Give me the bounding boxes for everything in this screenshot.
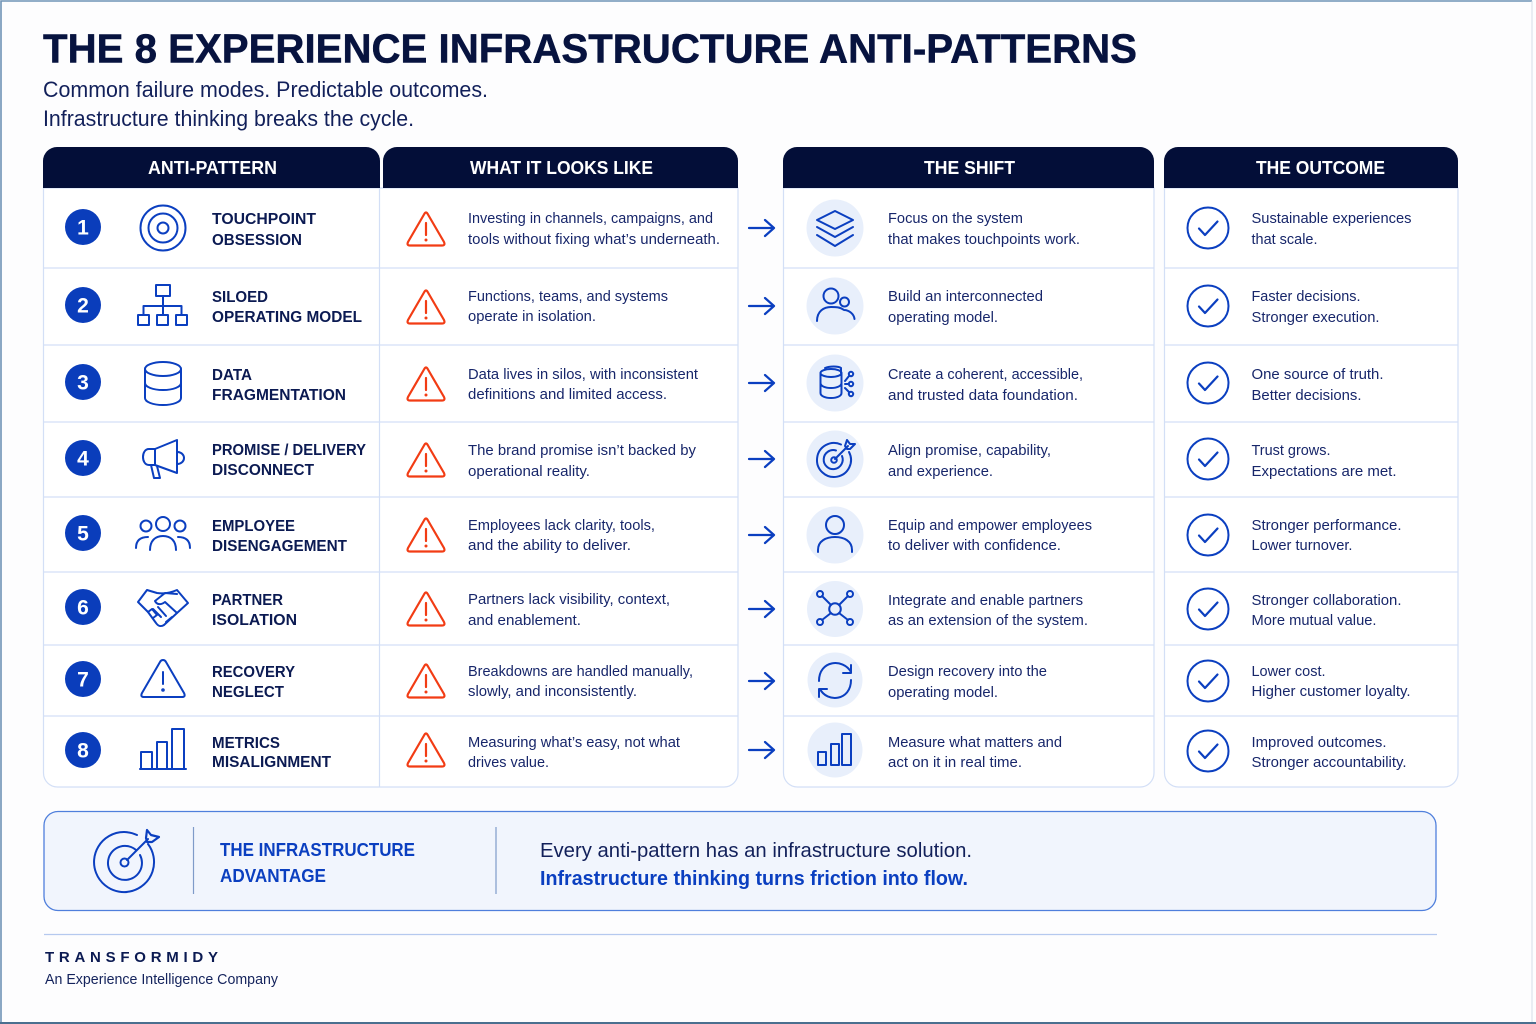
icon: data network	[820, 366, 853, 398]
row 3: 3	[77, 372, 89, 394]
row 2: 2	[77, 294, 89, 318]
subtitle: Common failure modes. Predictable outcomes.	[43, 77, 488, 102]
row 4	[65, 430, 1396, 488]
row 3: Data lives in silos, with inconsistent	[468, 366, 699, 383]
callout: infrastructure advantage: Infrastructure thinking turns friction into flow.	[540, 867, 968, 890]
row 7	[65, 652, 1410, 708]
row 7: RECOVERY	[212, 664, 295, 681]
row 3: definitions and limited access.	[468, 386, 667, 403]
row 4: Trust grows.	[1252, 442, 1330, 459]
header: anti-pattern: ANTI-PATTERN	[148, 158, 277, 178]
callout: infrastructure advantage: THE INFRASTRUCTURE	[220, 840, 415, 860]
row 6: More mutual value.	[1252, 612, 1376, 629]
icon: megaphone	[143, 440, 184, 478]
row 1: Focus on the system	[888, 210, 1023, 227]
row 5: Lower turnover.	[1252, 537, 1352, 554]
row 4: The brand promise isn’t backed by	[468, 442, 696, 459]
row 6: Partners lack visibility, context,	[468, 591, 670, 608]
row 4: operational reality.	[468, 463, 590, 480]
row 3: FRAGMENTATION	[212, 387, 346, 404]
row 2: Build an interconnected	[888, 288, 1043, 305]
icon: layers	[817, 211, 853, 246]
row 5: DISENGAGEMENT	[212, 538, 347, 555]
icon: team	[136, 517, 190, 550]
header: anti-pattern	[43, 147, 380, 188]
header: the shift: THE SHIFT	[924, 158, 1015, 178]
row 6: and enablement.	[468, 612, 581, 629]
row 1: that makes touchpoints work.	[888, 231, 1080, 248]
row 8: Measuring what’s easy, not what	[468, 734, 681, 751]
row 1: tools without fixing what’s underneath.	[468, 231, 720, 248]
row 6: as an extension of the system.	[888, 612, 1088, 629]
row 4: Align promise, capability,	[888, 442, 1051, 459]
row 8: METRICS	[212, 735, 280, 752]
row 6: Stronger collaboration.	[1252, 592, 1402, 609]
subtitle	[43, 77, 488, 131]
row 4: 4	[77, 448, 89, 470]
icon: bar chart small	[818, 734, 851, 765]
row 8: act on it in real time.	[888, 754, 1022, 771]
row 5: Equip and empower employees	[888, 517, 1092, 534]
row 3	[65, 354, 1384, 412]
icon: people	[817, 288, 854, 321]
row 7: Higher customer loyalty.	[1252, 683, 1410, 700]
icon: target with arrow	[94, 830, 159, 892]
row 2	[65, 278, 1380, 334]
subtitle: Infrastructure thinking breaks the cycle.	[43, 106, 414, 131]
icon: target and arrow	[817, 440, 855, 477]
row 1: OBSESSION	[212, 232, 302, 249]
row 3: One source of truth.	[1252, 366, 1384, 383]
row 4: PROMISE / DELIVERY	[212, 442, 366, 459]
header: the outcome: THE OUTCOME	[1256, 158, 1385, 178]
row 2: SILOED	[212, 289, 268, 306]
header: the outcome	[1164, 133, 1458, 188]
panel: outcome body	[1164, 188, 1458, 787]
row 1: that scale.	[1252, 231, 1318, 248]
row 8: drives value.	[468, 754, 549, 771]
icon: database	[145, 362, 181, 405]
icon: handshake	[138, 590, 188, 626]
row 3: Better decisions.	[1252, 387, 1362, 404]
row 1: Investing in channels, campaigns, and	[468, 210, 713, 227]
row 7: slowly, and inconsistently.	[468, 683, 637, 700]
row 5: EMPLOYEE	[212, 518, 295, 535]
row 8: Measure what matters and	[888, 734, 1062, 751]
row 8: 8	[77, 740, 89, 762]
row 1	[65, 200, 1412, 256]
row 5: Stronger performance.	[1252, 517, 1402, 534]
header: the shift	[783, 147, 1154, 188]
title: THE 8 EXPERIENCE INFRASTRUCTURE ANTI-PATTERNS	[43, 26, 1137, 72]
row 4: and experience.	[888, 463, 993, 480]
row 7: 7	[77, 668, 89, 692]
row 2: operate in isolation.	[468, 308, 596, 325]
row 1: 1	[77, 216, 89, 240]
row 6: PARTNER	[212, 592, 283, 609]
icon: org chart	[138, 285, 187, 325]
callout: infrastructure advantage	[44, 812, 1436, 910]
panel: shift body	[783, 188, 1154, 787]
row 7: operating model.	[888, 684, 998, 701]
icon: network nodes	[817, 591, 853, 625]
row 8: Improved outcomes.	[1252, 734, 1386, 751]
row 2: OPERATING MODEL	[212, 309, 362, 326]
row 5: and the ability to deliver.	[468, 537, 631, 554]
row 3: Create a coherent, accessible,	[888, 366, 1083, 383]
row 2: Faster decisions.	[1252, 288, 1360, 305]
row 5: 5	[77, 522, 89, 546]
row 6: ISOLATION	[212, 612, 297, 629]
row 2: Functions, teams, and systems	[468, 288, 668, 305]
panel: left table body	[43, 188, 738, 787]
row 4: DISCONNECT	[212, 462, 314, 479]
row 6: Integrate and enable partners	[888, 592, 1083, 609]
row 6	[65, 581, 1402, 637]
row 7: Lower cost.	[1252, 663, 1326, 680]
row 3: and trusted data foundation.	[888, 387, 1078, 404]
footer: brand	[45, 949, 279, 988]
row 2: operating model.	[888, 309, 998, 326]
row 1: Sustainable experiences	[1252, 210, 1412, 227]
row 2: Stronger execution.	[1252, 309, 1380, 326]
icon: refresh	[819, 663, 851, 698]
row 5: to deliver with confidence.	[888, 537, 1061, 554]
row 7: NEGLECT	[212, 684, 284, 701]
icon: bar chart	[140, 729, 186, 769]
row 1: TOUCHPOINT	[212, 211, 316, 228]
row 7: Breakdowns are handled manually,	[468, 663, 693, 680]
callout: infrastructure advantage: ADVANTAGE	[220, 866, 326, 886]
icon: alert triangle	[141, 660, 185, 697]
row 6: 6	[77, 596, 89, 620]
row 5	[65, 506, 1402, 564]
footer: brand: An Experience Intelligence Company	[45, 972, 279, 988]
row 8: MISALIGNMENT	[212, 754, 331, 771]
row 8	[65, 722, 1406, 778]
row 8: Stronger accountability.	[1252, 754, 1406, 771]
icon: person	[818, 516, 852, 552]
row 4: Expectations are met.	[1252, 463, 1396, 480]
row 3: DATA	[212, 367, 252, 384]
icon: target rings	[140, 206, 186, 250]
row 5: Employees lack clarity, tools,	[468, 517, 655, 534]
footer: brand: TRANSFORMIDY	[45, 949, 218, 966]
header: what it looks like	[383, 147, 738, 188]
callout: infrastructure advantage: Every anti-pattern has an infrastructure solution.	[540, 839, 972, 862]
row 7: Design recovery into the	[888, 663, 1047, 680]
header: what it looks like: WHAT IT LOOKS LIKE	[470, 158, 653, 178]
